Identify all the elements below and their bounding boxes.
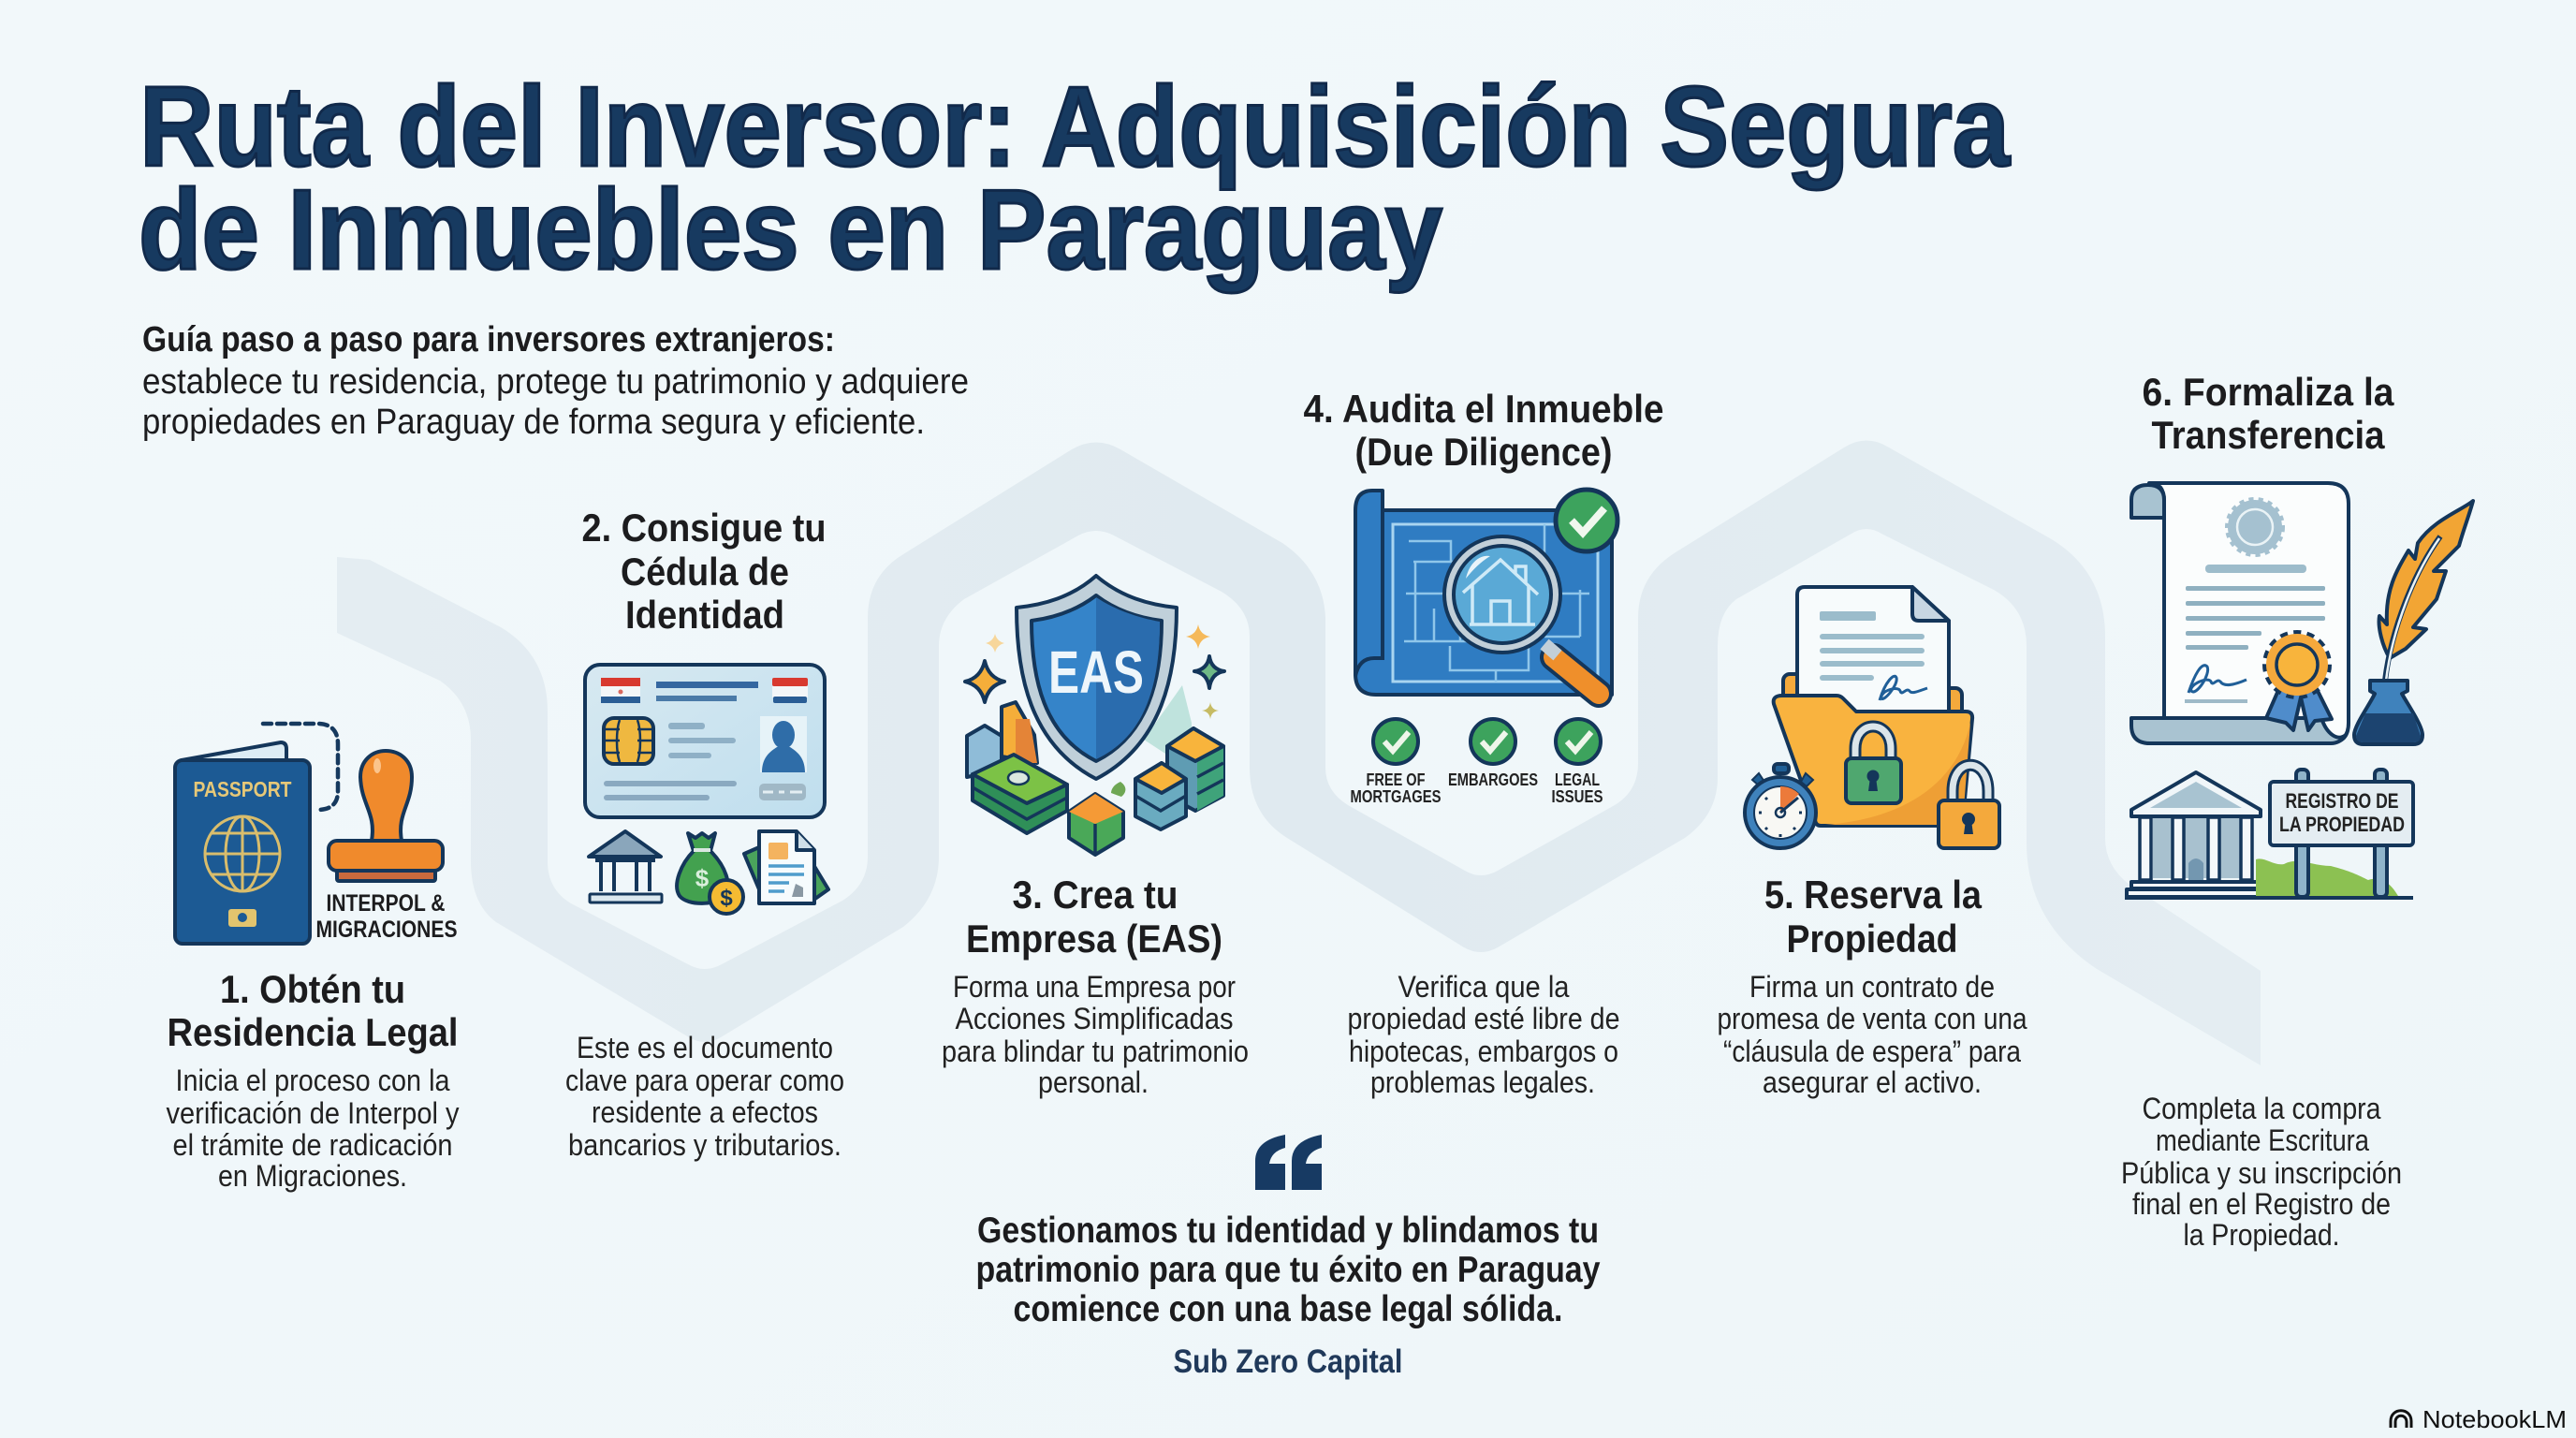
subtitle: establece tu residencia, protege tu patrimonio y adquiere (142, 362, 969, 402)
subtitle: propiedades en Paraguay de forma segura y eficiente. (142, 403, 925, 442)
rosette (2266, 683, 2332, 730)
icon label (316, 890, 457, 943)
icon: passport (175, 742, 310, 944)
body text: problemas legales. (1370, 1065, 1595, 1099)
body text (942, 970, 1249, 1099)
quote text: patrimonio para que tu éxito en Paraguay (975, 1250, 1601, 1290)
body text: Firma un contrato de (1749, 970, 1995, 1004)
body text: en Migraciones. (218, 1159, 407, 1193)
icon: folder with contract, locks and stopwatch (1745, 587, 1999, 848)
icon label: INTERPOL & (326, 890, 446, 917)
step 5 (1717, 587, 2027, 1099)
icon: money bag (677, 833, 743, 914)
icon: registry sign: REGISTRO DE (2286, 789, 2398, 813)
body text: para blindar tu patrimonio (942, 1034, 1249, 1068)
icon label: MIGRACIONES (316, 917, 457, 943)
icon: ID card (585, 665, 825, 817)
big check badge (1556, 490, 1617, 551)
money stack (973, 774, 1067, 833)
heading: Propiedad (1786, 917, 1958, 961)
heading: Transferencia (2151, 413, 2385, 457)
heading (167, 967, 459, 1054)
icon: document with banknote (744, 831, 828, 903)
body text: mediante Escritura (2156, 1123, 2369, 1157)
body text: hipotecas, embargos o (1349, 1034, 1618, 1068)
checklist: ISSUES (1552, 787, 1603, 806)
checklist: LEGAL (1555, 770, 1600, 789)
body text: final en el Registro de (2132, 1187, 2391, 1221)
body text: Verifica que la (1398, 970, 1570, 1004)
orange lock (1953, 765, 1988, 803)
quote attribution: Sub Zero Capital (1174, 1343, 1402, 1380)
body text (2121, 1092, 2402, 1252)
body text: clave para operar como (565, 1064, 844, 1097)
icon: registry sign: LA PROPIEDAD (2279, 813, 2405, 836)
sparkles (965, 624, 1224, 719)
body text: promesa de venta con una (1717, 1002, 2027, 1035)
icon: quill and inkwell (2354, 501, 2473, 744)
body text: Acciones Simplificadas (955, 1002, 1234, 1035)
title (139, 63, 2011, 293)
icon: deed scroll (2131, 483, 2349, 743)
body text: residente a efectos (592, 1095, 818, 1129)
heading: 6. Formaliza la (2142, 370, 2394, 414)
body text: Pública y su inscripción (2121, 1156, 2402, 1190)
body text: Inicia el proceso con la (176, 1064, 450, 1097)
icon: registry sign (2125, 770, 2413, 898)
body text (167, 1064, 459, 1193)
body text: personal. (1038, 1065, 1149, 1099)
heading: 4. Audita el Inmueble (1303, 387, 1664, 431)
heading: 3. Crea tu (1013, 873, 1178, 917)
body text: Completa la compra (2142, 1092, 2381, 1125)
step 6 (2121, 370, 2473, 1252)
stopwatch (1774, 764, 1789, 773)
heading (1764, 873, 1983, 961)
body text: “cláusula de espera” para (1723, 1034, 2021, 1068)
body text: asegurar el activo. (1763, 1065, 1982, 1099)
icon: rubber stamp (329, 751, 443, 881)
body text: propiedad esté libre de (1348, 1002, 1619, 1035)
heading (966, 873, 1222, 961)
body text: la Propiedad. (2183, 1218, 2340, 1252)
heading: Identidad (625, 593, 784, 637)
icon: money bag: $ (695, 864, 710, 892)
icon: bank (589, 831, 662, 902)
cube (1069, 794, 1123, 855)
icon: registry building (2127, 772, 2263, 897)
body text: Este es el documento (577, 1031, 833, 1064)
quote (975, 1135, 1601, 1380)
step 1 (167, 724, 459, 1193)
step 4 (1303, 387, 1664, 1099)
heading: Residencia Legal (167, 1010, 459, 1054)
subtitle (142, 320, 969, 442)
icon: quotation mark (1255, 1135, 1322, 1190)
NotebookLM logo: NotebookLM (2422, 1405, 2567, 1433)
icon: money bag: $ (720, 886, 733, 911)
heading (2142, 370, 2394, 457)
body text (1717, 970, 2027, 1099)
heading: Cédula de (621, 550, 789, 594)
body text: bancarios y tributarios. (568, 1128, 842, 1162)
arrow: dashed connector (263, 724, 338, 810)
heading: 1. Obtén tu (220, 967, 405, 1011)
heading: (Due Diligence) (1355, 430, 1612, 474)
heading (582, 506, 826, 637)
icon: passport: PASSPORT (193, 777, 292, 801)
heading: Empresa (EAS) (966, 917, 1222, 961)
quote text: comience con una base legal sólida. (1013, 1289, 1563, 1329)
step 2 (565, 506, 844, 1162)
body text: verificación de Interpol y (167, 1096, 459, 1130)
shield (1017, 576, 1177, 779)
small leaf (1111, 782, 1125, 797)
checklist: MORTGAGES (1350, 787, 1442, 806)
title: Ruta del Inversor: Adquisición Segura (139, 63, 2011, 190)
heading: 5. Reserva la (1764, 873, 1983, 917)
body text: Forma una Empresa por (953, 970, 1236, 1004)
icon: blueprint with magnifier (1355, 490, 1617, 695)
icon: EAS shield with assets: EAS (1048, 638, 1144, 706)
block stacks (1167, 728, 1223, 811)
heading (1303, 387, 1664, 474)
checklist: EMBARGOES (1448, 770, 1538, 789)
quote text (975, 1211, 1601, 1329)
magnifier (1554, 657, 1599, 694)
serpentine route ribbon (337, 440, 2261, 1065)
body text (565, 1031, 844, 1162)
body text: el trámite de radicación (172, 1128, 453, 1162)
subtitle: Guía paso a paso para inversores extranjeros: (142, 320, 835, 360)
title: de Inmuebles en Paraguay (139, 166, 1442, 293)
body text (1348, 970, 1619, 1099)
heading: 2. Consigue tu (582, 506, 826, 550)
icon: EAS shield with assets (965, 576, 1224, 855)
checklist (1350, 719, 1603, 806)
quote text: Gestionamos tu identidad y blindamos tu (977, 1211, 1599, 1251)
green lock (1855, 726, 1891, 760)
checklist: FREE OF (1367, 770, 1425, 789)
step 3 (942, 576, 1249, 1099)
